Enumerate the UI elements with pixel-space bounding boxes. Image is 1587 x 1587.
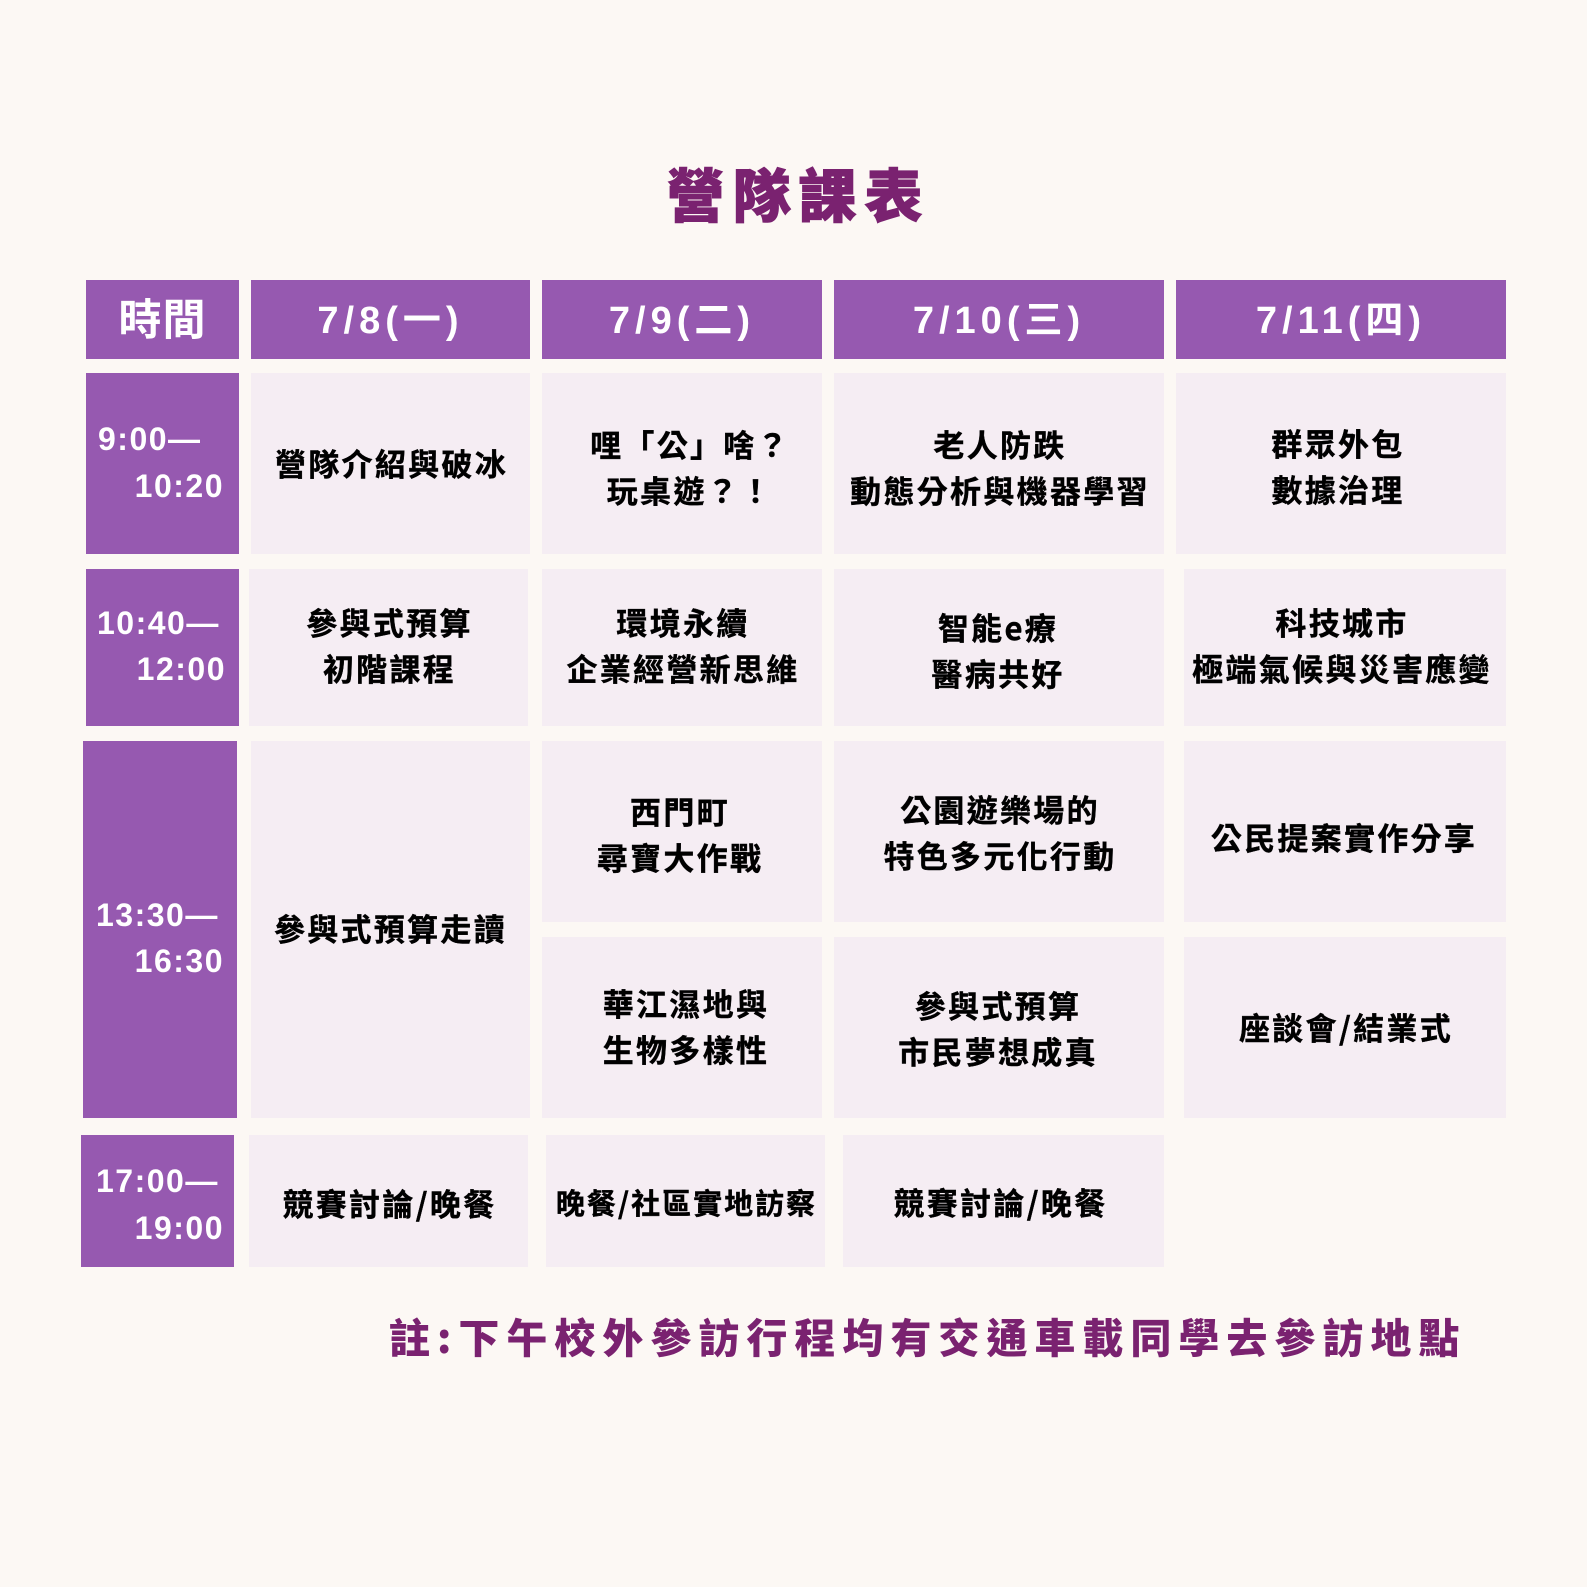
session: 7/9 evening: [546, 1135, 825, 1267]
session: 7/8 evening: 競賽討論/晚餐: [282, 1180, 497, 1225]
session: 7/10 morning 1: [834, 373, 1164, 554]
time slot 13:30-16:30: 13:30—: [96, 897, 219, 933]
table header: 7/8: 7/8(一): [317, 300, 464, 342]
time slot 13:30-16:30: 16:30: [135, 943, 224, 979]
session: 7/10 afternoon 2: [834, 937, 1164, 1118]
session: 7/8 morning 1: 營隊介紹與破冰: [275, 440, 508, 484]
table header: 7/9: 7/9(二): [609, 300, 755, 342]
session: 7/9 evening: 晚餐/社區實地訪察: [556, 1181, 817, 1223]
session: 7/11 morning 2: 極端氣候與災害應變: [1192, 644, 1492, 690]
session: 7/9 morning 2: [542, 569, 822, 726]
session: 7/9 morning 1: 哩「公」啥？: [590, 420, 790, 466]
session: 7/10 afternoon 1: 特色多元化行動: [883, 832, 1117, 876]
session: 7/10 morning 2: 醫病共好: [931, 650, 1065, 694]
session: 7/9 afternoon 2: [542, 937, 822, 1118]
session: 7/9 morning 1: [542, 373, 822, 554]
session: 7/8 morning 2: [249, 569, 528, 726]
session: 7/11 afternoon 2: [1184, 937, 1506, 1118]
time slot 10:40-12:00: 10:40—: [97, 605, 220, 641]
session: 7/10 afternoon 1: [834, 741, 1164, 922]
session: 7/9 afternoon 2: 華江濕地與: [603, 980, 769, 1024]
session: 7/9 afternoon 1: [542, 741, 822, 922]
table header: 7/10: [834, 280, 1164, 359]
session: 7/9 morning 1: 玩桌遊？！: [607, 466, 773, 512]
session: 7/8 morning 2: 初階課程: [323, 644, 456, 690]
time slot 10:40-12:00: [86, 569, 239, 726]
session: 7/11 morning 1: [1176, 373, 1506, 554]
session: 7/11 afternoon 1: [1184, 741, 1506, 922]
table header: 7/11: [1176, 280, 1506, 359]
session: 7/8 evening: [249, 1135, 528, 1267]
session: 7/9 morning 2: 企業經營新思維: [566, 644, 800, 690]
table header: time: [86, 280, 239, 359]
session: 7/11 morning 1: 數據治理: [1271, 466, 1405, 510]
table header: 7/8: [251, 280, 530, 359]
session: 7/8 morning 2: 參與式預算: [306, 598, 473, 644]
session: 7/9 morning 2: 環境永續: [616, 598, 750, 644]
time slot 17:00-19:00: 17:00—: [96, 1163, 219, 1199]
time slot 10:40-12:00: 12:00: [137, 651, 226, 687]
session: 7/8 morning 1: [251, 373, 530, 554]
session: 7/10 afternoon 2: 參與式預算: [915, 982, 1081, 1026]
session: 7/9 afternoon 1: 西門町: [630, 788, 730, 832]
title: 營隊課表: [666, 150, 930, 234]
time slot 17:00-19:00: [81, 1135, 234, 1267]
session: 7/11 morning 2: 科技城市: [1275, 598, 1409, 644]
session: 7/10 evening: 競賽討論/晚餐: [893, 1179, 1108, 1224]
session: 7/11 morning 1: 群眾外包: [1271, 420, 1405, 464]
table header: 7/10: 7/10(三): [913, 300, 1085, 342]
time slot 17:00-19:00: 19:00: [135, 1210, 224, 1246]
session: 7/8 afternoon: 參與式預算走讀: [274, 904, 507, 950]
time slot 9:00-10:20: 9:00—: [98, 421, 202, 457]
session: 7/10 morning 2: [834, 569, 1164, 726]
session: 7/11 morning 2: [1184, 569, 1506, 726]
session: 7/9 afternoon 2: 生物多樣性: [603, 1026, 769, 1070]
time slot 9:00-10:20: [86, 373, 239, 554]
session: 7/10 evening: [843, 1135, 1164, 1267]
footnote: 註:下午校外參訪行程均有交通車載同學去參訪地點: [389, 1305, 1466, 1365]
session: 7/10 afternoon 1: 公園遊樂場的: [900, 786, 1100, 830]
session: 7/10 morning 2: 智能e療: [938, 604, 1058, 648]
session: 7/9 afternoon 1: 尋寶大作戰: [597, 834, 763, 878]
session: 7/10 afternoon 2: 市民夢想成真: [898, 1028, 1098, 1072]
session: 7/10 morning 1: 老人防跌: [933, 420, 1067, 466]
session: 7/11 afternoon 1: 公民提案實作分享: [1211, 814, 1477, 858]
session: 7/11 afternoon 2: 座談會/結業式: [1239, 1004, 1453, 1048]
session: 7/8 afternoon: [251, 741, 530, 1118]
time slot 13:30-16:30: [83, 741, 237, 1118]
session: 7/10 morning 1: 動態分析與機器學習: [850, 466, 1150, 512]
time slot 9:00-10:20: 10:20: [135, 468, 224, 504]
table header: 7/11: 7/11(四): [1256, 300, 1426, 342]
table header: 7/9: [542, 280, 822, 359]
table header: time: 時間: [118, 286, 206, 348]
